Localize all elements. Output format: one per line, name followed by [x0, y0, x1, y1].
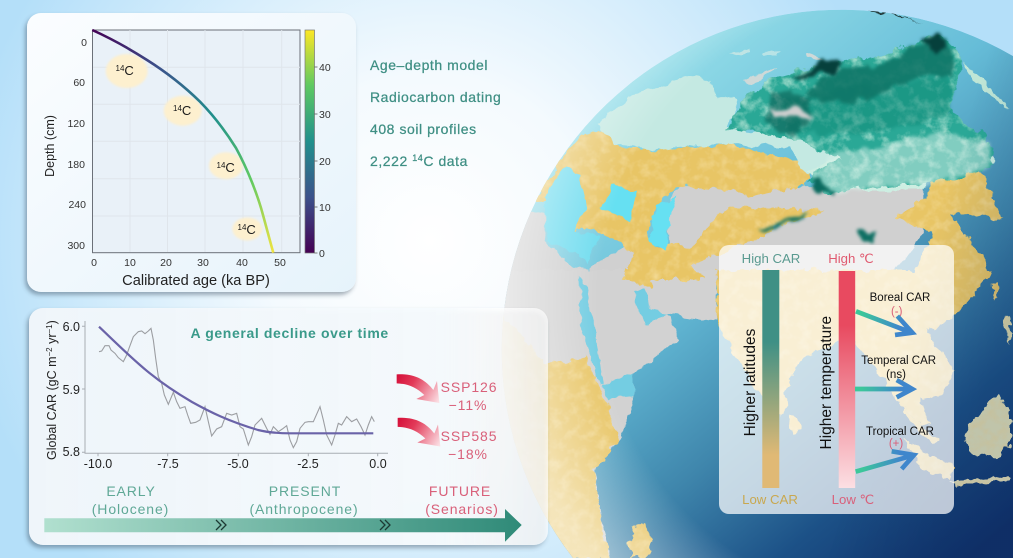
- y axis title: −1: [45, 324, 54, 333]
- y axis title: Depth (cm): [43, 115, 57, 177]
- x axis labels: -10.0: [84, 457, 112, 471]
- red arrow: SSP585: [398, 418, 440, 446]
- x axis labels: -7.5: [157, 457, 179, 471]
- rotated labels: Higher latitudes: [742, 328, 759, 436]
- colour bar: 10: [319, 202, 331, 214]
- 14C labels: 14: [116, 64, 125, 73]
- y axis title: ): [45, 320, 59, 324]
- plot area: [92, 30, 300, 253]
- timeline arrow: [44, 509, 522, 542]
- sign labels: [889, 306, 903, 450]
- CAR trend line: [99, 327, 373, 433]
- x axis labels: 0.0: [369, 457, 387, 471]
- y axis title: Global CAR (gC m: [45, 356, 59, 460]
- x axis labels: [91, 257, 286, 269]
- y axis labels: 6.0: [63, 320, 80, 334]
- colour bar: 40: [319, 62, 331, 74]
- 14C labels: 14: [216, 161, 226, 170]
- 14C labels: C: [225, 160, 235, 175]
- SSP scenarios: −11%: [449, 397, 487, 413]
- x axis labels: 20: [160, 257, 172, 269]
- 14C labels: 14: [238, 223, 247, 232]
- period labels: (Senarios): [425, 501, 499, 517]
- SSP scenarios: −18%: [448, 446, 488, 462]
- SSP scenarios: [441, 379, 497, 462]
- colour bar: 0: [319, 248, 325, 260]
- chevrons: [216, 520, 390, 530]
- bar end labels: High ℃: [828, 251, 874, 266]
- text block: data summary: [370, 57, 501, 169]
- 14C labels: C: [124, 63, 134, 78]
- y axis labels: 60: [73, 77, 85, 89]
- rotated labels: [742, 316, 835, 449]
- biome labels: [861, 292, 936, 438]
- 14C labels: C: [246, 222, 256, 237]
- biome labels: (ns): [886, 369, 906, 381]
- text block: data summary: 408 soil profiles: [370, 121, 477, 137]
- biome labels: Boreal CAR: [870, 292, 930, 304]
- chart title: A general decline over time: [190, 325, 389, 341]
- 14C labels: C: [182, 103, 191, 118]
- period labels: FUTURE: [429, 483, 491, 499]
- bar end labels: High CAR: [742, 251, 800, 266]
- x axis title: Calibrated age (ka BP): [122, 273, 270, 289]
- 14C bubbles: [106, 54, 262, 240]
- 14C labels: [116, 63, 256, 237]
- chart axes: [82, 321, 388, 456]
- y axis labels: 0: [81, 37, 87, 49]
- text block: data summary: Age–depth model: [370, 57, 488, 73]
- CAR raw series: [99, 328, 374, 448]
- temperature bar: [839, 271, 855, 488]
- text block: data summary: Radiocarbon dating: [370, 89, 501, 105]
- trend arrows: [855, 311, 914, 472]
- text block: data summary: 14: [412, 153, 423, 163]
- 14C labels: 14: [173, 104, 182, 113]
- CAR bar: [762, 270, 779, 488]
- rotated labels: Higher temperature: [818, 316, 835, 449]
- colour bar: 30: [319, 109, 331, 121]
- sign labels: (-): [891, 306, 903, 318]
- period labels: PRESENT: [269, 483, 341, 499]
- bar end labels: Low CAR: [742, 492, 798, 507]
- text block: data summary: 2,222: [370, 153, 408, 169]
- red arrow: SSP126: [397, 374, 439, 403]
- y axis labels: 5.9: [63, 383, 80, 397]
- x axis labels: -2.5: [297, 457, 319, 471]
- period labels: [92, 483, 499, 517]
- y axis title: −2: [45, 347, 54, 356]
- y axis labels: [67, 37, 87, 252]
- x axis labels: 0: [91, 257, 97, 269]
- SSP scenarios: SSP126: [441, 379, 497, 395]
- biome labels: Temperal CAR: [861, 355, 936, 367]
- x axis labels: 10: [124, 257, 136, 269]
- period labels: EARLY: [106, 483, 156, 499]
- period labels: (Holocene): [92, 501, 169, 517]
- colour bar: 20: [319, 156, 331, 168]
- y axis labels: 5.8: [63, 445, 80, 459]
- x axis labels: [84, 457, 387, 471]
- bar end labels: Low ℃: [832, 492, 874, 507]
- x axis labels: 40: [236, 257, 248, 269]
- x axis labels: 30: [197, 257, 209, 269]
- x axis labels: -5.0: [227, 457, 249, 471]
- bar end labels: [742, 251, 874, 507]
- colour bar: [305, 30, 331, 260]
- y axis labels: 120: [67, 118, 85, 130]
- y axis labels: [63, 320, 80, 459]
- panel: global CAR timeline: [29, 308, 548, 545]
- text block: data summary: C data: [423, 153, 468, 169]
- y axis labels: 300: [67, 240, 85, 252]
- period labels: (Anthropocene): [249, 501, 359, 517]
- age-depth curve: [92, 30, 273, 253]
- y axis labels: 180: [67, 159, 85, 171]
- y axis title: yr: [45, 333, 59, 347]
- sign labels: (+): [889, 438, 903, 450]
- panel: latitude and temperature: [719, 245, 954, 514]
- x axis labels: 50: [274, 257, 286, 269]
- panel: age-depth model: [27, 13, 356, 292]
- SSP scenarios: SSP585: [441, 428, 497, 444]
- globe map: [490, 6, 1013, 558]
- y axis labels: 240: [68, 199, 86, 211]
- biome labels: Tropical CAR: [866, 426, 934, 438]
